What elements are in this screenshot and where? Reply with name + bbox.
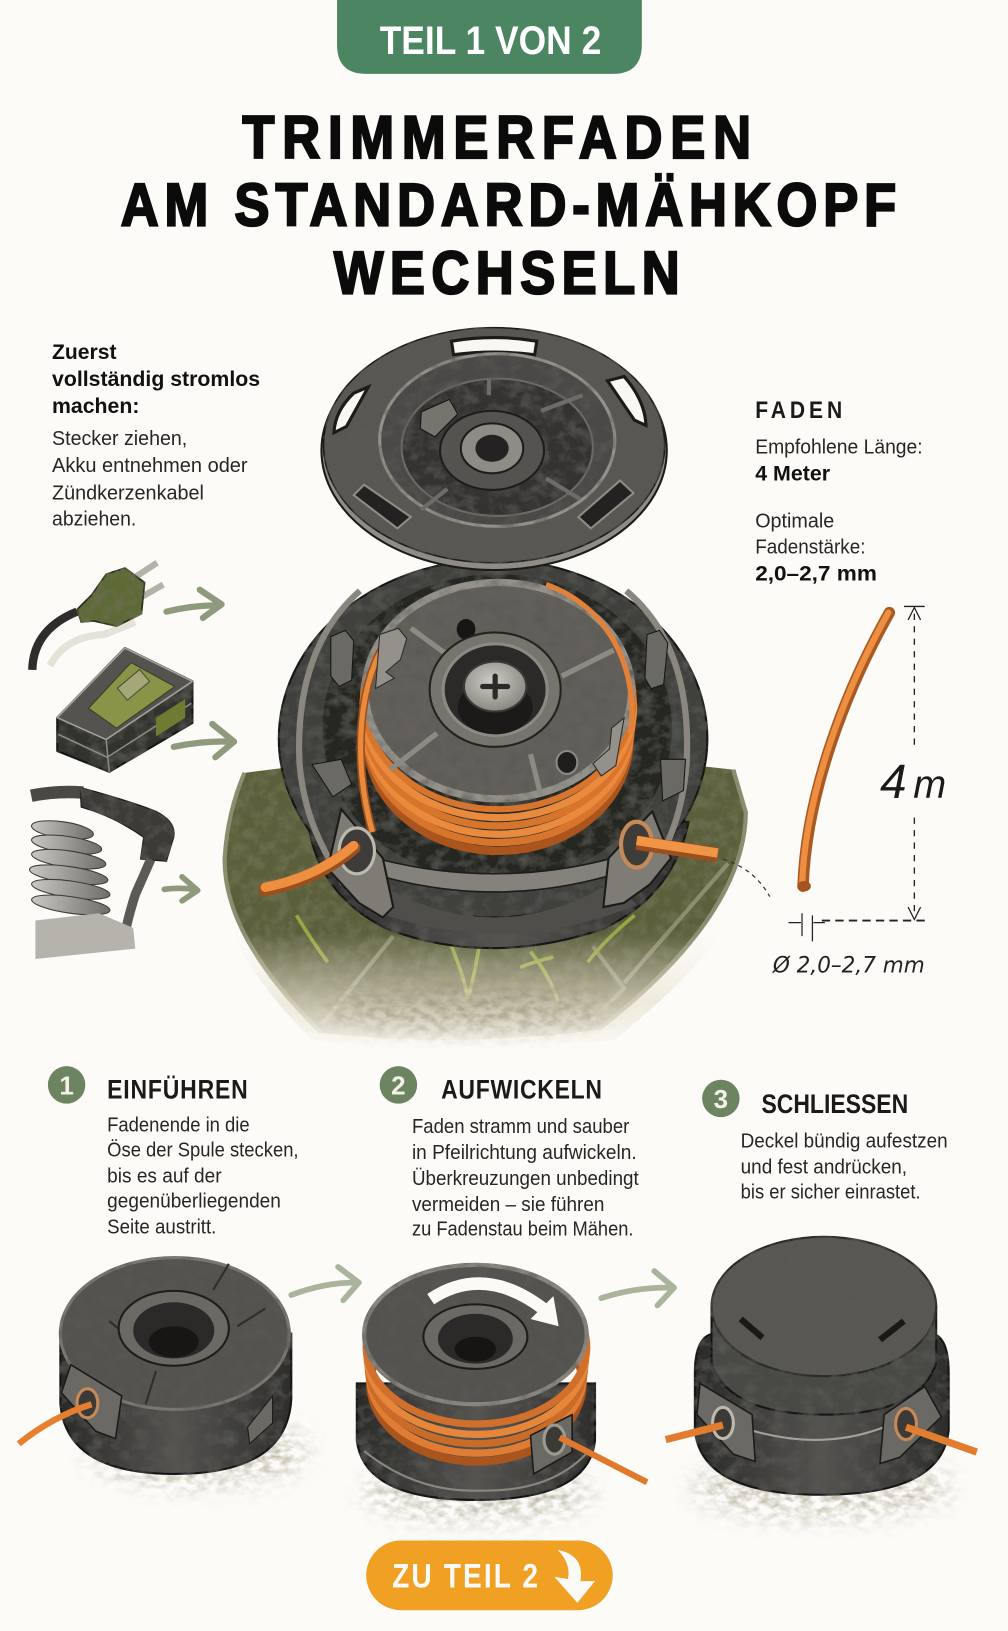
step text 3 xyxy=(741,1130,948,1203)
step text 2: in Pfeilrichtung aufwickeln. xyxy=(412,1142,637,1164)
lower housing xyxy=(308,822,689,948)
base rim 3 xyxy=(751,1427,884,1440)
cable xyxy=(32,612,77,670)
sand specks xyxy=(322,984,614,1030)
dimension lines xyxy=(904,605,925,607)
step badge 3: 3 xyxy=(714,1084,728,1114)
step text 1: Seite austritt. xyxy=(107,1217,216,1239)
lid tab xyxy=(420,399,458,437)
lid recess xyxy=(380,354,615,526)
step badge 3 xyxy=(702,1080,740,1117)
inner clips xyxy=(312,630,686,801)
hub xyxy=(430,632,561,747)
diameter label: Ø 2,0–2,7 mm xyxy=(772,954,925,979)
text block: thread specs: 2,0–2,7 mm xyxy=(755,562,877,585)
step badge 1: 1 xyxy=(59,1070,74,1100)
step heading 2: AUFWICKELN xyxy=(441,1075,602,1105)
text block: power off warning: machen: xyxy=(52,395,139,418)
thread ends xyxy=(265,848,354,889)
title: WECHSELN xyxy=(334,239,680,306)
cap top 3 xyxy=(712,1237,936,1376)
spool illustration 1 xyxy=(19,1258,307,1484)
spokes 1 xyxy=(109,1264,265,1404)
body 1 xyxy=(60,1334,291,1474)
boot xyxy=(80,787,174,861)
guard rim and ribs xyxy=(225,770,746,1033)
arrow: plug xyxy=(166,590,222,618)
thread 2 xyxy=(560,1438,647,1482)
thread coil xyxy=(363,589,634,851)
step badge 2: 2 xyxy=(391,1070,406,1100)
text block: thread specs: FADEN xyxy=(755,397,842,423)
thread 1 xyxy=(19,1404,92,1444)
step badge 2 xyxy=(380,1066,417,1104)
lug 1 xyxy=(61,1365,122,1439)
lead xyxy=(122,859,151,949)
clip 1 xyxy=(248,1396,273,1444)
cap wall 3 xyxy=(712,1306,936,1415)
cable top xyxy=(31,792,83,796)
dirt 2 xyxy=(364,1466,593,1520)
outer shell xyxy=(279,560,707,917)
button: next part: ZU TEIL 2 xyxy=(392,1557,538,1595)
text block: thread specs: Optimale xyxy=(755,510,834,532)
spool cover lid xyxy=(321,328,667,570)
arrow: spark plug xyxy=(164,877,198,901)
lid hub xyxy=(440,411,544,490)
cooling fins xyxy=(28,817,111,919)
text block: thread specs: Fadenstärke: xyxy=(755,536,865,558)
text block: power off warning: Zuerst xyxy=(52,341,117,364)
bolt xyxy=(464,662,526,711)
step text 2 xyxy=(412,1116,639,1241)
text block: power off warning: abziehen. xyxy=(52,508,136,530)
icon: power plug xyxy=(32,563,163,670)
sand fade xyxy=(218,759,751,1048)
shell rim xyxy=(299,591,687,884)
lug 2 xyxy=(531,1415,572,1474)
title xyxy=(121,104,896,306)
text block: power off warning: vollständig stromlos xyxy=(52,368,260,391)
base 2 xyxy=(357,1383,595,1500)
disc 2 xyxy=(364,1265,587,1404)
step text 3: Deckel bündig aufestzen xyxy=(741,1130,948,1152)
text block: thread specs: 4 Meter xyxy=(755,463,830,486)
icon: down arrow xyxy=(554,1550,595,1603)
dirt 1 xyxy=(88,1418,307,1484)
hub 2 xyxy=(423,1304,527,1369)
pins xyxy=(133,563,163,598)
callout dash xyxy=(723,859,770,897)
threads 3 xyxy=(666,1425,723,1440)
spool spokes xyxy=(390,628,614,796)
step 1 xyxy=(48,1066,299,1239)
arrow: battery xyxy=(174,724,234,757)
button: next part xyxy=(366,1541,613,1610)
length label: 4 xyxy=(880,756,907,809)
step text 1 xyxy=(107,1115,299,1239)
front ring xyxy=(372,859,616,892)
text block: power off warning xyxy=(52,341,260,530)
step 3 xyxy=(702,1080,948,1203)
grass guard xyxy=(218,759,751,1048)
hub 1 xyxy=(119,1291,229,1366)
spool eyelet xyxy=(457,619,475,640)
step text 2: Faden stramm und sauber xyxy=(412,1116,630,1138)
lid dark slots xyxy=(354,481,634,528)
step text 2: vermeiden – sie führen xyxy=(412,1194,604,1216)
part badge: TEIL 1 VON 2 xyxy=(380,19,601,63)
text block: thread specs: Empfohlene Länge: xyxy=(755,437,923,459)
part badge xyxy=(337,0,642,74)
cap slots xyxy=(741,1319,904,1340)
lid slots xyxy=(334,338,646,433)
step badge 1 xyxy=(48,1066,85,1104)
lid ribs xyxy=(421,380,583,510)
right eyelet lug xyxy=(603,811,671,907)
step text 1: Öse der Spule stecken, xyxy=(107,1140,299,1162)
plug shadow xyxy=(50,622,135,666)
step text 2: Überkreuzungen unbedingt xyxy=(412,1168,639,1190)
guard surface xyxy=(224,765,746,1040)
spool disc xyxy=(365,582,631,799)
spool notches xyxy=(376,628,407,689)
main trimmer head xyxy=(265,560,770,948)
text block: power off warning: Zündkerzenkabel xyxy=(52,482,204,504)
step text 1: bis es auf der xyxy=(107,1166,222,1188)
step text 1: Fadenende in die xyxy=(107,1115,250,1137)
text block: power off warning: Akku entnehmen oder xyxy=(52,455,248,477)
spool illustration 3 xyxy=(666,1237,977,1517)
disc 1 xyxy=(60,1258,289,1409)
step text 1: gegenüberliegenden xyxy=(107,1191,281,1213)
step heading 1: EINFÜHREN xyxy=(107,1074,248,1105)
left eyelet lug xyxy=(328,809,393,917)
title: TRIMMERFADEN xyxy=(242,104,751,171)
text block: power off warning: Stecker ziehen, xyxy=(52,428,187,450)
coil 2 xyxy=(366,1270,587,1461)
base rim 2 xyxy=(364,1451,589,1491)
lugs 3 xyxy=(697,1383,755,1461)
grass blades xyxy=(296,915,635,1004)
step text 3: bis er sicher einrastet. xyxy=(741,1181,921,1203)
arrow: step 2 to 3 xyxy=(601,1271,674,1305)
step heading 3: SCHLIESSEN xyxy=(761,1089,908,1119)
spool illustration 2 xyxy=(357,1265,647,1520)
rotation arrow xyxy=(431,1284,543,1309)
icon: spark plug cable xyxy=(28,787,174,959)
loose thread strand xyxy=(361,637,390,832)
text block: thread specs xyxy=(755,397,923,585)
plug body xyxy=(77,568,145,626)
inner well xyxy=(322,574,672,882)
upper coil strand xyxy=(546,585,632,733)
engine block xyxy=(35,913,135,959)
dirt 3 xyxy=(692,1458,952,1517)
lower wall below ring xyxy=(359,880,637,934)
length label: m xyxy=(913,763,946,807)
title: AM STANDARD-MÄHKOPF xyxy=(121,171,896,239)
icon: battery pack xyxy=(57,648,192,772)
base 3 xyxy=(695,1334,949,1495)
step text 2: zu Fadenstau beim Mähen. xyxy=(412,1219,634,1241)
arrow: step 1 to 2 xyxy=(291,1267,359,1300)
thread piece xyxy=(803,613,889,886)
step text 3: und fest andrücken, xyxy=(741,1156,907,1178)
diagram: thread length xyxy=(772,606,946,979)
step 2 xyxy=(380,1066,639,1241)
